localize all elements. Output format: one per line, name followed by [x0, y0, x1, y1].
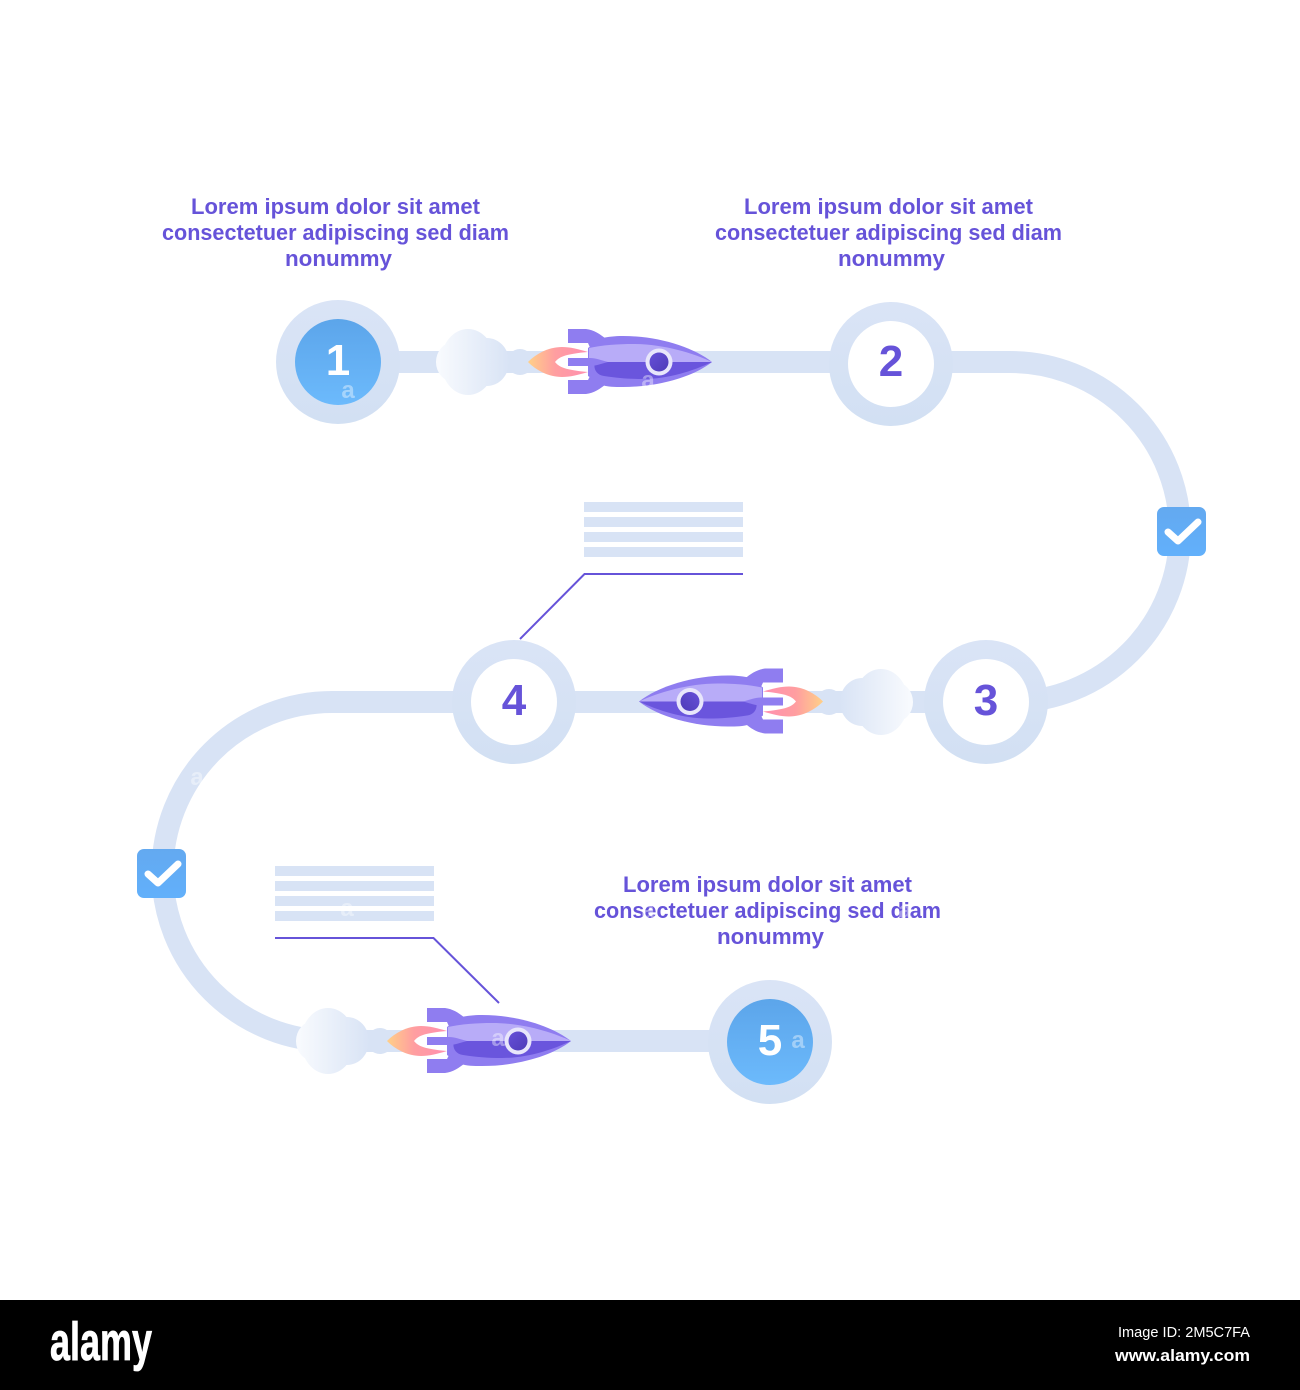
- faint image watermarks: a: [491, 1025, 505, 1052]
- text block: step 1: [162, 194, 509, 271]
- cloud: rocket 2 exhaust: [816, 669, 913, 735]
- step 2 node: [829, 302, 953, 426]
- step 5 node: a: [791, 1027, 805, 1054]
- rocket 3: [387, 1008, 571, 1073]
- text block: step 5: [594, 872, 941, 949]
- text block: step 2: Lorem ipsum dolor sit amet: [744, 194, 1034, 219]
- text block: step 5: consectetuer adipiscing sed diam: [594, 898, 941, 923]
- footer: stock image credit bar: www.alamy.com: [1114, 1346, 1250, 1365]
- faint image watermarks: a: [641, 897, 655, 924]
- placeholder callout: step 4: [520, 502, 743, 639]
- step 4 node: [452, 640, 576, 764]
- faint image watermarks: [190, 367, 912, 1052]
- step 1 node: [276, 300, 400, 424]
- footer: stock image credit bar: [0, 1300, 1300, 1390]
- text block: step 1: consectetuer adipiscing sed diam: [162, 220, 509, 245]
- step 3 node: [924, 640, 1048, 764]
- text block: step 5: nonummy: [717, 924, 825, 949]
- step 5 node: [708, 980, 832, 1104]
- step 2 node: 2: [879, 337, 903, 386]
- faint image watermarks: a: [898, 897, 912, 924]
- faint image watermarks: a: [190, 764, 204, 791]
- step 1 node: a: [341, 377, 355, 404]
- winding roadmap path: [162, 362, 1180, 1041]
- step 4 node: 4: [502, 676, 527, 725]
- cloud: rocket 1 exhaust: [436, 329, 533, 395]
- faint image watermarks: a: [340, 895, 354, 922]
- footer: stock image credit bar: Image ID: 2M5C7FA: [1118, 1324, 1250, 1341]
- step 3 node: 3: [974, 676, 998, 725]
- text block: step 2: consectetuer adipiscing sed diam: [715, 220, 1062, 245]
- icon: checkbox right: [1157, 507, 1206, 556]
- step 1 node: 1: [326, 336, 350, 385]
- icon: checkbox left: [137, 849, 186, 898]
- text block: step 2: nonummy: [838, 246, 946, 271]
- rocket 2: [639, 668, 823, 734]
- faint image watermarks: a: [641, 367, 655, 394]
- text block: step 1: Lorem ipsum dolor sit amet: [191, 194, 481, 219]
- text block: step 5: Lorem ipsum dolor sit amet: [623, 872, 913, 897]
- cloud: rocket 3 exhaust: [296, 1008, 393, 1074]
- text block: step 2: [715, 194, 1062, 271]
- rocket 1: [528, 329, 712, 394]
- text block: step 1: nonummy: [285, 246, 393, 271]
- placeholder callout: bottom left: [275, 866, 499, 1003]
- step 5 node: 5: [758, 1016, 782, 1065]
- footer: stock image credit bar: alamy: [50, 1312, 152, 1372]
